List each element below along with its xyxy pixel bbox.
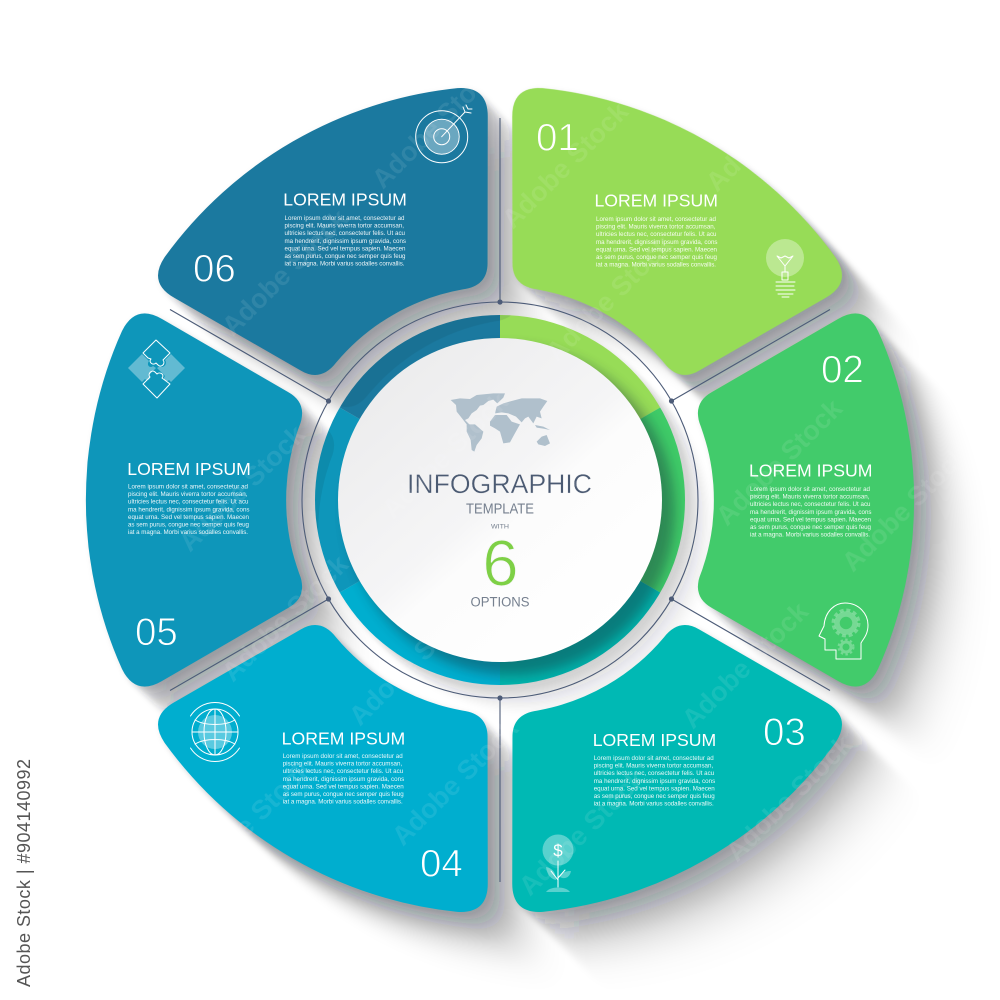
panel text: 04: iat a magna. Morbi varius sodalles convallis. — [283, 799, 403, 806]
panel text: 04: equat urna. Sed vel tempus sapien. Maecen — [283, 783, 404, 790]
panel text: 01: LOREM IPSUM — [594, 191, 718, 211]
panel text: 04: ultricies lectus nec, consectetur felis. Ut acu — [283, 768, 404, 775]
panel text: 06 — [193, 190, 407, 291]
panel text: 04 — [282, 728, 463, 886]
centre title: INFOGRAPHIC — [407, 469, 592, 499]
panel text: 03: ma hendrerit, dignissim ipsum gravida, cons — [594, 778, 715, 785]
panel text: 06: iat a magna. Morbi varius sodalles convallis. — [284, 261, 405, 268]
segment 04 shape — [131, 578, 563, 952]
long shadows of segments — [102, 90, 968, 966]
colour ring with six sectors — [315, 315, 685, 685]
connector circle, radial lines and dots — [170, 118, 830, 882]
centre disk — [338, 338, 662, 662]
panel text: 05: ma hendrerit, dignissim ipsum gravida, cons — [128, 506, 250, 513]
panel text: 06: LOREM IPSUM — [283, 190, 407, 210]
panel text: 02: Lorem ipsum dolor sit amet, consectetur ad — [750, 486, 871, 493]
panel text: 06: Lorem ipsum dolor sit amet, consectetur ad — [284, 215, 405, 222]
segment 02 shape — [698, 313, 914, 687]
panel text: 04: 04 — [420, 843, 463, 886]
stock id: Adobe Stock | #904140992 — [14, 759, 34, 987]
panel text: 06: 06 — [193, 248, 236, 291]
segment 01 shape — [437, 48, 869, 422]
panel text: 05: ultricies lectus nec, consectetur felis. Ut acu — [128, 499, 249, 506]
segment 06 shape — [131, 48, 563, 422]
panel text: 02: piscing elit. Mauris viverra tortor accumsan, — [750, 494, 870, 501]
panel text: 02: LOREM IPSUM — [749, 461, 872, 481]
panel text: 04: ma hendrerit, dignissim ipsum gravida, cons — [283, 776, 404, 783]
watermark: Adobe Stock — [503, 429, 642, 567]
watermark — [163, 56, 975, 901]
panel text: 05: piscing elit. Mauris viverra tortor accumsan, — [128, 491, 248, 498]
panel text: 04: LOREM IPSUM — [282, 728, 405, 748]
watermark: Adobe Stock — [720, 729, 859, 867]
icon: globe — [190, 703, 240, 761]
panel text: 05 — [127, 459, 251, 654]
watermark: Adobe Stock — [180, 753, 319, 891]
watermark: Adobe Stock — [700, 59, 839, 197]
panel text: 06: as sem purus, congue nec semper quis feug — [284, 253, 406, 260]
icon: money plant — [542, 834, 574, 892]
options label: OPTIONS — [470, 595, 530, 610]
panel text: 03: as sem purus, congue nec semper quis feug — [594, 793, 715, 800]
number six: 6 — [482, 527, 519, 600]
icon: money plant: $ — [553, 841, 563, 860]
panel text: 05: 05 — [135, 611, 178, 654]
watermark: Adobe Stock — [216, 549, 355, 687]
watermark: Adobe Stock — [343, 593, 482, 731]
panel text: 02: 02 — [821, 349, 864, 392]
panel text: 06: ma hendrerit, dignissim ipsum gravida, cons — [284, 238, 406, 245]
segment 03 shape — [437, 578, 869, 952]
panel text: 05: iat a magna. Morbi varius sodalles convallis. — [128, 529, 248, 536]
panel text: 01: equat urna. Sed vel tempus sapien. Maecen — [596, 246, 718, 253]
panel text: 02: as sem purus, congue nec semper quis feug — [750, 524, 872, 531]
panel text: 05: LOREM IPSUM — [127, 459, 251, 479]
watermark: Adobe Stock — [366, 56, 505, 194]
icon: puzzle pieces — [128, 340, 185, 398]
watermark: Adobe Stock — [376, 386, 515, 524]
panel text: 03: Lorem ipsum dolor sit amet, consectetur ad — [594, 755, 714, 762]
icon: light bulb — [766, 239, 804, 297]
centre subtitle: TEMPLATE — [466, 502, 534, 518]
panel text: 02: iat a magna. Morbi varius sodalles convallis. — [750, 532, 870, 539]
watermark: Adobe Stock — [163, 83, 302, 221]
with label: WITH — [491, 524, 509, 531]
panel text: 01: 01 — [536, 117, 579, 160]
panel text: 02: ultricies lectus nec, consectetur felis. Ut acu — [750, 501, 871, 508]
panel text: 05: Lorem ipsum dolor sit amet, consectetur ad — [128, 484, 249, 490]
panel text: 01: ma hendrerit, dignissim ipsum gravida, cons — [596, 239, 718, 246]
segment 05 shape — [86, 313, 302, 687]
panel text: 04: Lorem ipsum dolor sit amet, consectetur ad — [283, 753, 403, 760]
watermark: Adobe Stock — [216, 203, 355, 341]
watermark: Adobe Stock — [540, 229, 679, 367]
panel text: 01: piscing elit. Mauris viverra tortor accumsan, — [596, 224, 716, 231]
panel text: 06: ultricies lectus nec, consectetur felis. Ut acu — [284, 230, 406, 237]
panel text: 01: as sem purus, congue nec semper quis feug — [596, 254, 718, 261]
watermark: Adobe Stock — [173, 419, 312, 557]
panel text: 03 — [593, 711, 806, 808]
panel text: 02 — [749, 349, 872, 539]
watermark: Adobe Stock — [386, 713, 525, 851]
watermark: Adobe Stock — [496, 96, 635, 234]
panel text: 03: equat urna. Sed vel tempus sapien. Maecen — [594, 785, 715, 792]
world map — [451, 393, 550, 452]
watermark: Adobe Stock — [836, 439, 975, 577]
ring cast shadow — [318, 318, 713, 713]
panel text: 03: LOREM IPSUM — [593, 730, 716, 750]
panel text: 03: 03 — [763, 711, 806, 754]
icon: head with gears — [819, 603, 868, 659]
panel text: 01 — [536, 117, 718, 269]
panel text: 03: ultricies lectus nec, consectetur felis. Ut acu — [594, 770, 715, 777]
panel text: 03: iat a magna. Morbi varius sodalles convallis. — [594, 801, 714, 808]
watermark: Adobe Stock — [710, 393, 849, 531]
panel text: 05: equat urna. Sed vel tempus sapien. Maecen — [128, 514, 250, 521]
panel text: 06: equat urna. Sed vel tempus sapien. Maecen — [284, 245, 406, 252]
panel text: 01: iat a magna. Morbi varius sodalles convallis. — [596, 262, 716, 269]
panel text: 01: ultricies lectus nec, consectetur felis. Ut acu — [596, 231, 717, 238]
panel text: 02: equat urna. Sed vel tempus sapien. Maecen — [750, 516, 872, 523]
panel text: 04: as sem purus, congue nec semper quis feug — [283, 791, 404, 798]
icon: target with arrow — [416, 105, 472, 163]
panel text: 01: Lorem ipsum dolor sit amet, consectetur ad — [596, 216, 717, 223]
watermark: Adobe Stock — [676, 596, 815, 734]
panel text: 02: ma hendrerit, dignissim ipsum gravida, cons — [750, 509, 872, 516]
panel text: 04: piscing elit. Mauris viverra tortor accumsan, — [283, 761, 402, 768]
panel text: 06: piscing elit. Mauris viverra tortor accumsan, — [284, 223, 404, 230]
watermark: Adobe Stock — [513, 763, 652, 901]
panel text: 03: piscing elit. Mauris viverra tortor accumsan, — [594, 763, 713, 770]
disk shadow on ring — [347, 347, 675, 675]
panel text: 05: as sem purus, congue nec semper quis feug — [128, 522, 250, 528]
